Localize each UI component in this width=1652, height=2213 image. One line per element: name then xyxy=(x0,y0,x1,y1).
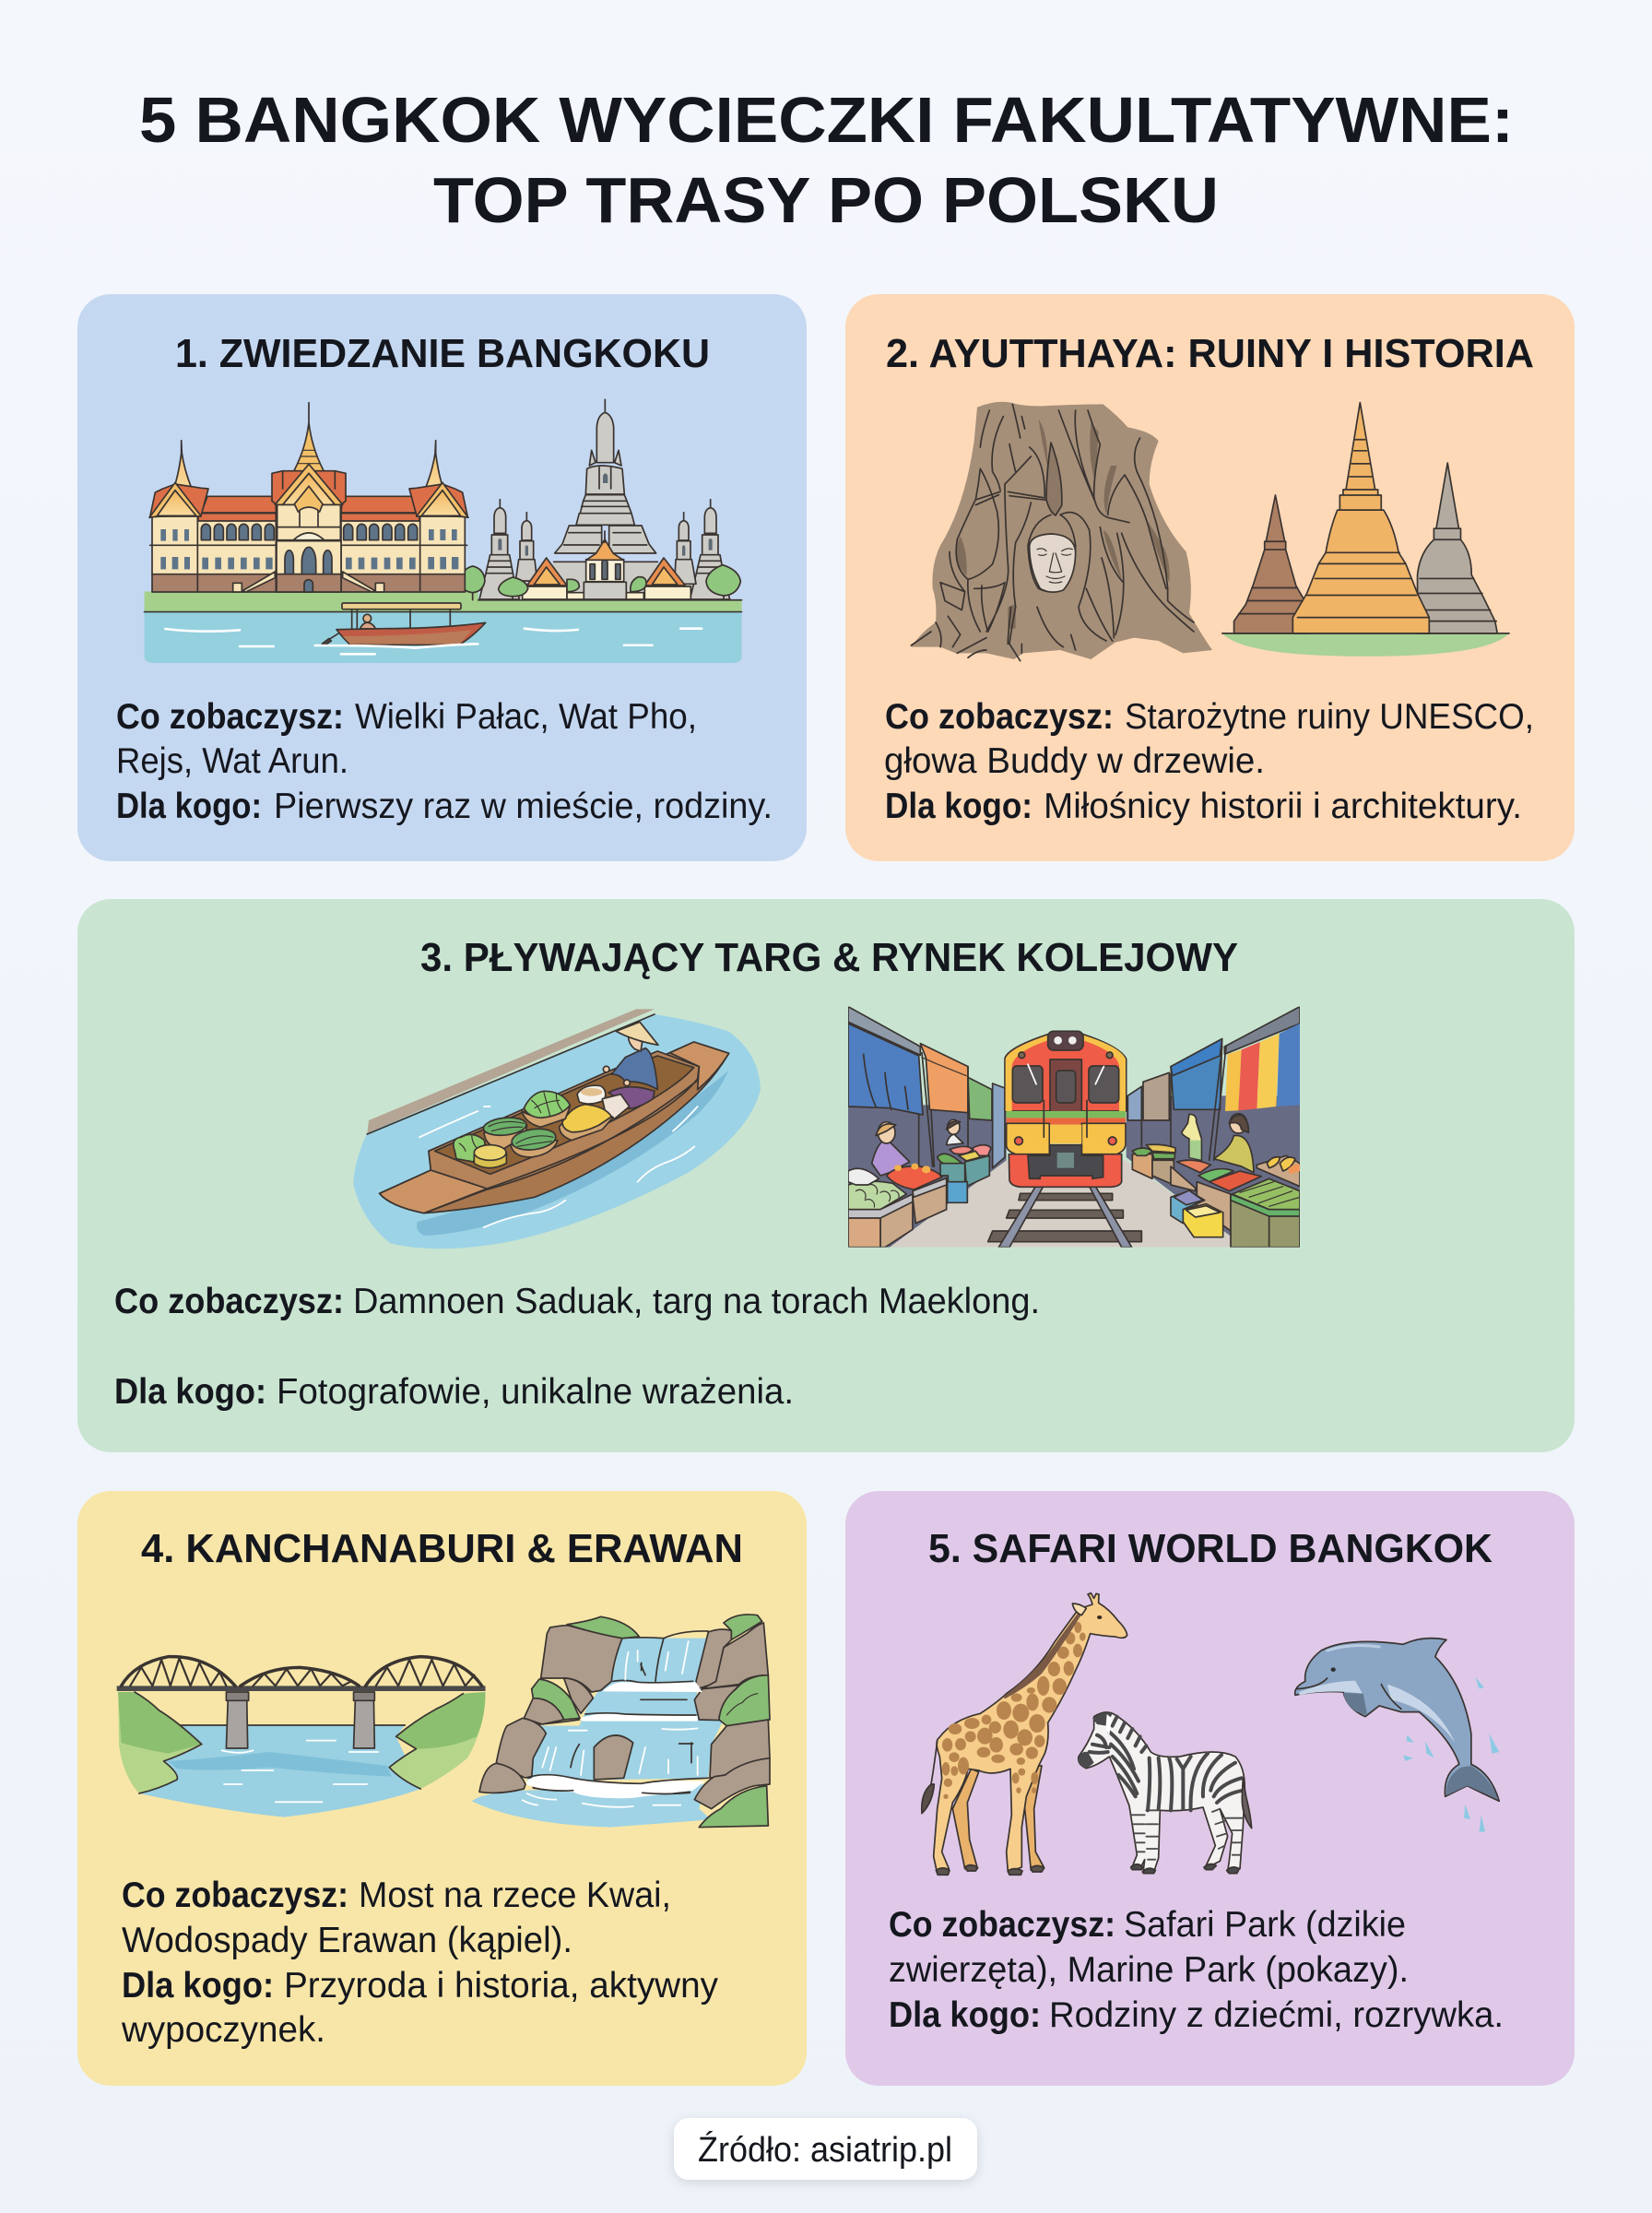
railway track xyxy=(988,1187,1141,1248)
text: panel 2 details xyxy=(884,697,1534,826)
text: panel 4 details: Dla kogo: xyxy=(122,1966,274,2006)
river and riverbank xyxy=(145,591,741,663)
zebra xyxy=(1079,1712,1252,1874)
train market scene xyxy=(848,1007,1300,1248)
text: panel 5 details: Co zobaczysz: xyxy=(889,1905,1115,1945)
produce baskets xyxy=(454,1085,630,1168)
text: panel 5 details: Safari Park (dzikie xyxy=(1124,1905,1406,1945)
text: panel 4 details: Co zobaczysz: xyxy=(122,1876,348,1915)
text: panel 3 details xyxy=(114,1282,1040,1412)
waterfall xyxy=(472,1615,770,1828)
stall backdrop xyxy=(848,1095,1300,1248)
text: panel 2 details: Dla kogo: xyxy=(885,787,1032,826)
text: panel 2 details: Starożytne ruiny UNESCO, xyxy=(1125,697,1534,737)
text: panel 4 details: Most na rzece Kwai, xyxy=(359,1876,671,1915)
tree with Buddha head xyxy=(911,402,1212,661)
illustrations: River Kwai bridge and Erawan waterfall xyxy=(117,1615,770,1828)
bridge over the river xyxy=(117,1657,486,1817)
left vendors and stalls xyxy=(848,1119,991,1248)
text: panel 4 details: Wodospady Erawan (kąpiel). xyxy=(122,1921,572,1960)
illustrations: floating boat and Maeklong train market xyxy=(353,1007,1300,1249)
heading: panel 5: 5. SAFARI WORLD BANGKOK xyxy=(928,1526,1493,1571)
text: panel 1 details: Co zobaczysz: xyxy=(116,697,344,737)
dolphin xyxy=(1295,1639,1499,1832)
panel: 2. Ayutthaya xyxy=(845,294,1575,861)
heading: panel 1: 1. ZWIEDZANIE BANGKOKU xyxy=(175,331,710,376)
text: panel 5 details: Dla kogo: xyxy=(889,1995,1041,2035)
heading: panel 2: 2. AYUTTHAYA: RUINY I HISTORIA xyxy=(886,331,1534,376)
text: panel 1 details: Wielki Pałac, Wat Pho, xyxy=(355,697,697,737)
right awnings xyxy=(1127,1007,1300,1160)
panel: 4. Kanchanaburi and Erawan xyxy=(77,1491,807,2086)
text: panel 1 details: Dla kogo: xyxy=(116,787,262,826)
source badge: Źródło: asiatrip.pl xyxy=(698,2130,952,2170)
text: panel 2 details: Miłośnicy historii i architektury. xyxy=(1044,787,1522,826)
Grand Palace xyxy=(149,403,486,654)
title: 5 BANGKOK WYCIECZKI FAKULTATYWNE: xyxy=(139,84,1514,156)
text: panel 1 details: Rejs, Wat Arun. xyxy=(116,741,348,781)
text: panel 4 details: Przyroda i historia, aktywny xyxy=(284,1966,718,2006)
right vendors and stalls xyxy=(1132,1114,1300,1248)
illustrations: giraffe, zebra and dolphin xyxy=(922,1593,1499,1875)
source badge xyxy=(674,2118,977,2180)
central pavilion xyxy=(272,403,346,592)
text: panel 5 details: Rodziny z dziećmi, rozrywka. xyxy=(1049,1995,1504,2035)
panel: 5. Safari World xyxy=(845,1491,1575,2086)
heading: panel 3: 3. PŁYWAJĄCY TARG & RYNEK KOLEJOWY xyxy=(420,935,1238,980)
text: panel 2 details: głowa Buddy w drzewie. xyxy=(884,741,1265,781)
text: panel 4 details xyxy=(121,1876,718,2050)
heading: panel 4: 4. KANCHANABURI & ERAWAN xyxy=(141,1526,743,1571)
right pavilion roof xyxy=(409,441,468,517)
panel: 1. Zwiedzanie Bangkoku xyxy=(77,294,807,861)
illustration: Buddha head in tree and stupas xyxy=(911,402,1509,661)
left pavilion roof xyxy=(149,441,208,517)
train xyxy=(1005,1031,1127,1187)
text: panel 5 details xyxy=(889,1905,1504,2035)
text: panel 3 details: Co zobaczysz: xyxy=(114,1282,344,1321)
text: panel 5 details: zwierzęta), Marine Park (pokazy). xyxy=(889,1950,1409,1990)
text: panel 3 details: Dla kogo: xyxy=(114,1372,266,1412)
illustration: Grand Palace, Wat Arun and river boat xyxy=(145,399,741,663)
stupas xyxy=(1222,403,1509,657)
text: panel 1 details xyxy=(116,697,773,826)
title xyxy=(139,84,1514,236)
text: panel 3 details: Fotografowie, unikalne wrażenia. xyxy=(277,1372,794,1412)
title: TOP TRASY PO POLSKU xyxy=(433,164,1219,236)
text: panel 4 details: wypoczynek. xyxy=(121,2010,325,2050)
text: panel 2 details: Co zobaczysz: xyxy=(885,697,1114,737)
floating market boat xyxy=(353,1009,761,1249)
boat vendor xyxy=(603,1022,658,1108)
river boat xyxy=(165,603,486,654)
text: panel 1 details: Pierwszy raz w mieście, rodziny. xyxy=(274,787,773,826)
text: panel 3 details: Damnoen Saduak, targ na torach Maeklong. xyxy=(353,1282,1040,1321)
panel: 3. Floating market and railway market xyxy=(77,899,1575,1452)
Wat Arun temple xyxy=(461,399,740,600)
giraffe xyxy=(922,1593,1127,1875)
left awnings xyxy=(848,1007,1005,1168)
